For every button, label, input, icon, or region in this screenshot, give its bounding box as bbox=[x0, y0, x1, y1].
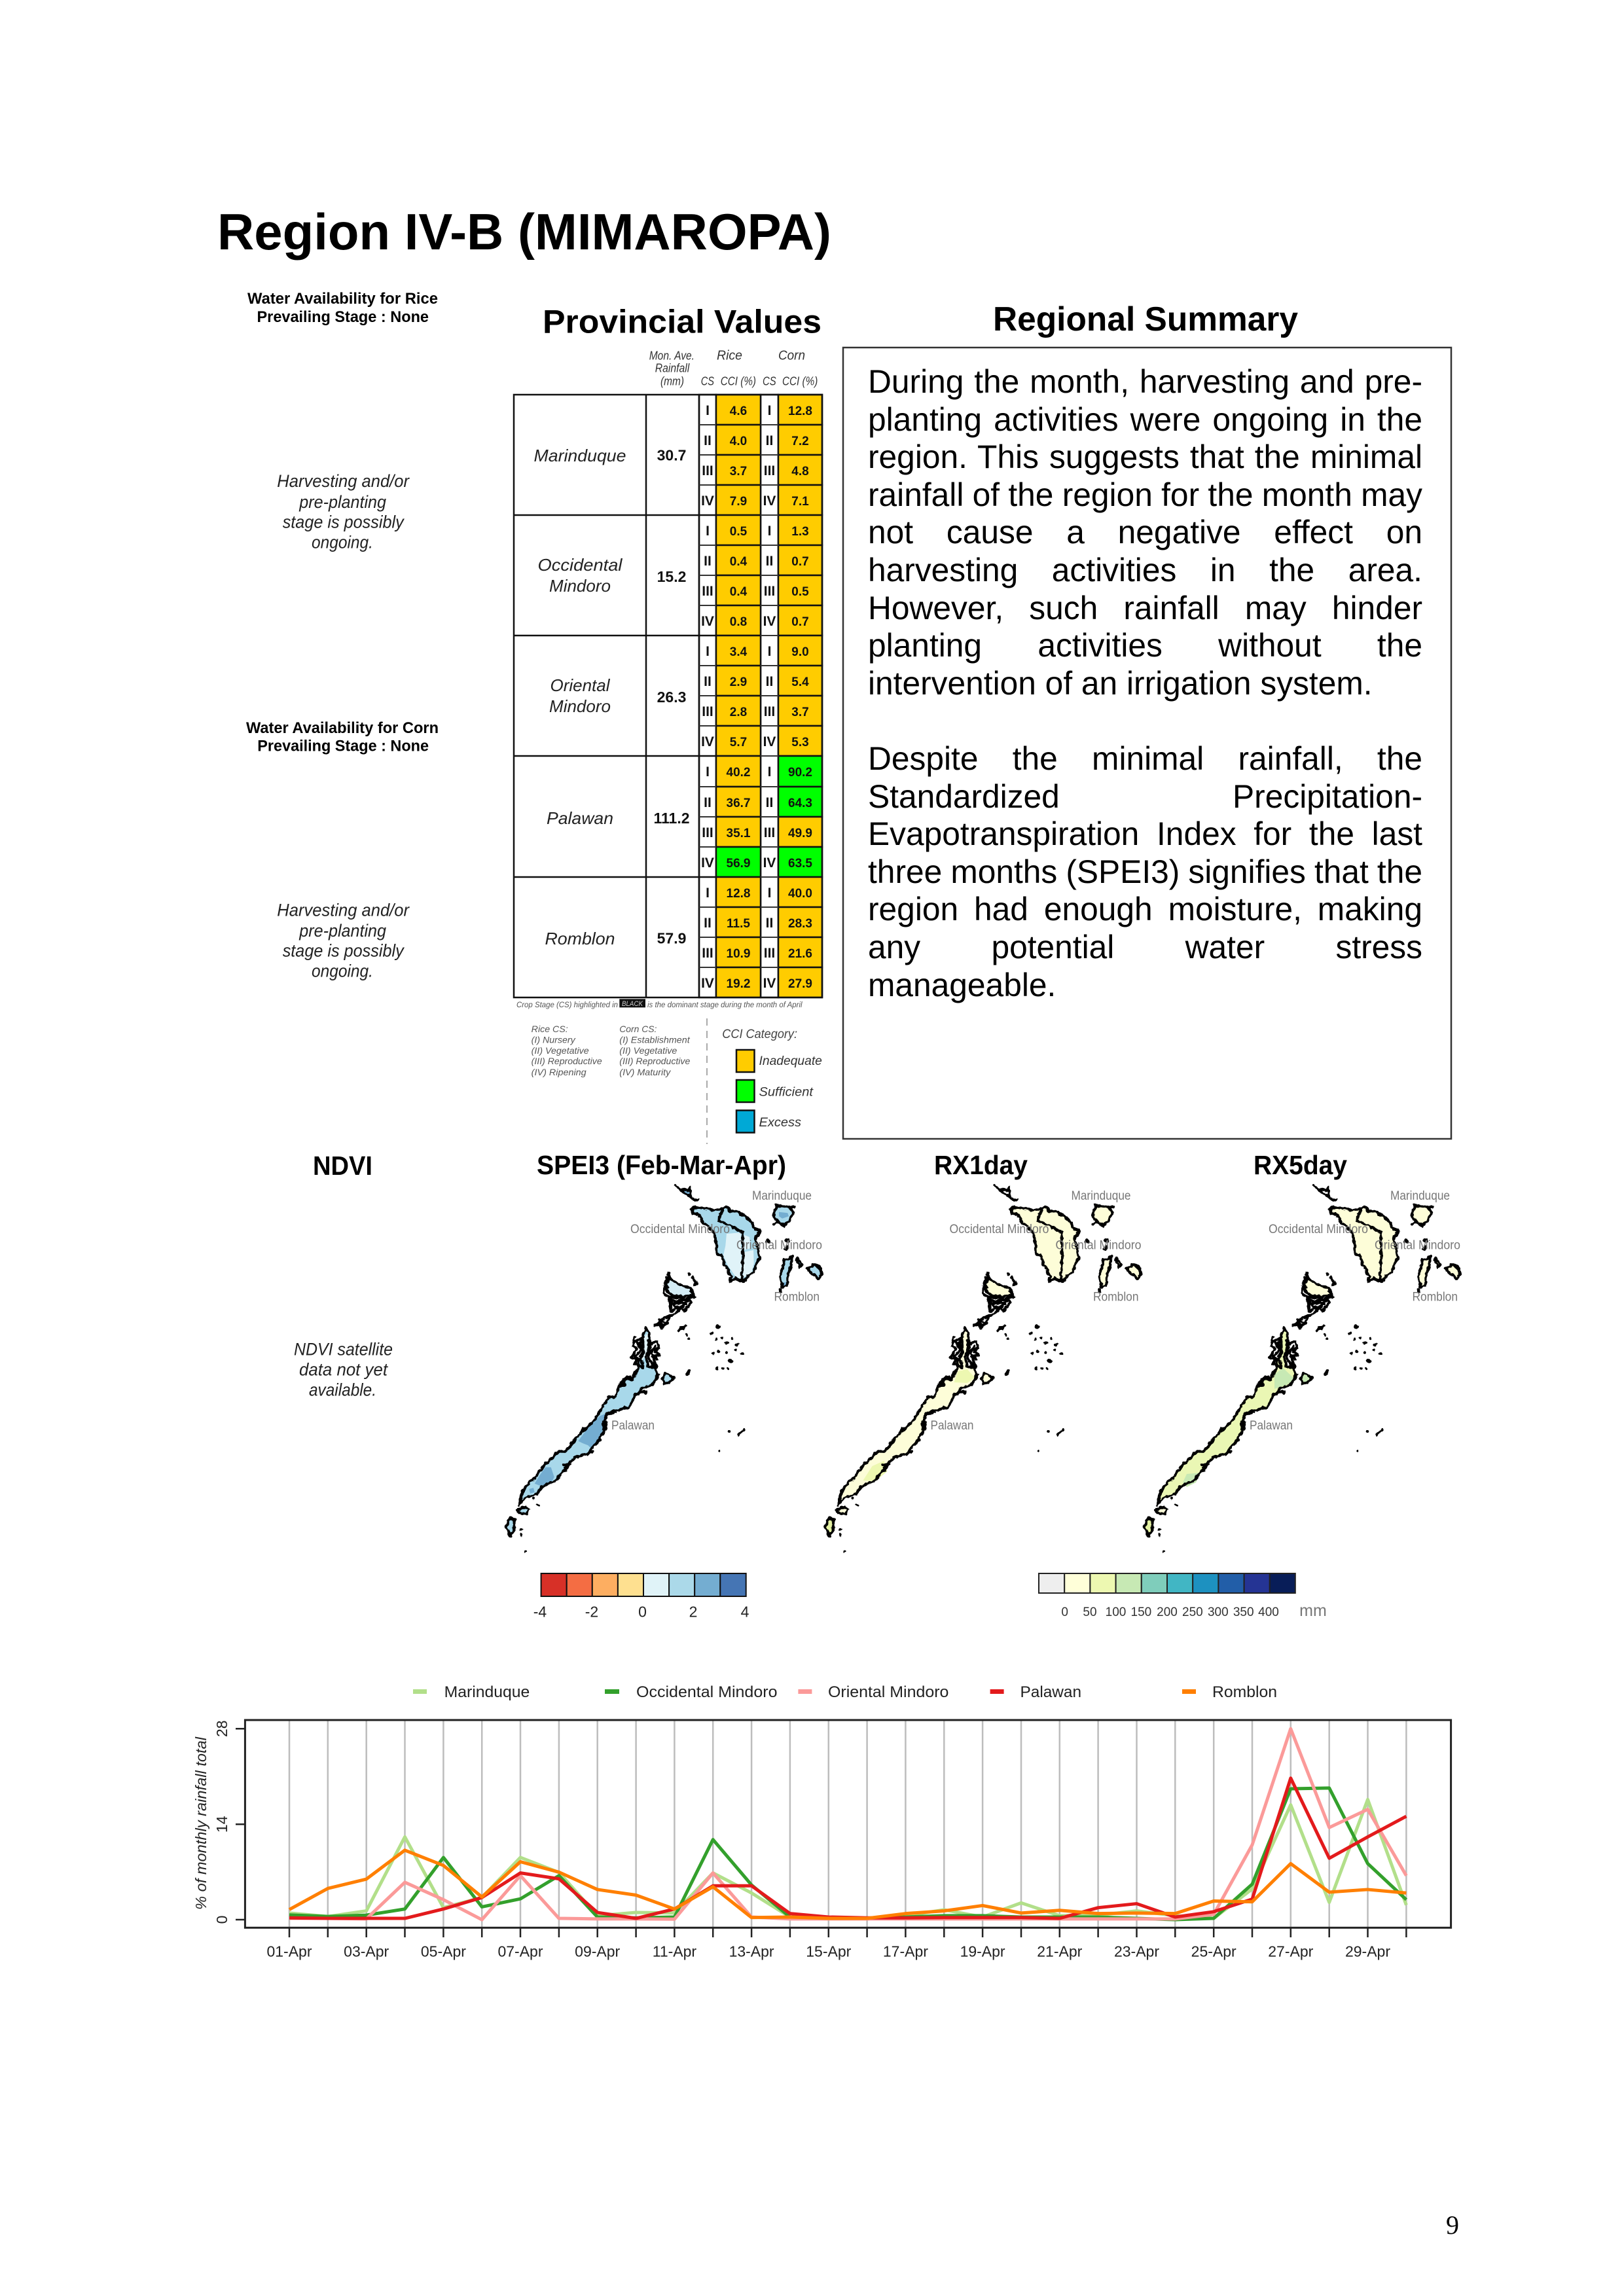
legend: rice crop stages: (I) Nursery bbox=[532, 1034, 576, 1045]
row group: Palawan: IV bbox=[701, 855, 714, 870]
row group: Oriental Mindoro: II bbox=[704, 674, 712, 689]
colour bar: SPEI3: 4 bbox=[741, 1604, 749, 1621]
row group: Oriental Mindoro: IV bbox=[701, 734, 714, 749]
y axis labels: % of monthly rainfall total bbox=[192, 1736, 209, 1910]
text block: corn stage note: stage is possibly bbox=[283, 941, 405, 961]
y axis labels: 28 bbox=[213, 1720, 230, 1737]
row group: Palawan: 90.2 bbox=[788, 766, 812, 780]
row group: Occidental Mindoro: Mindoro bbox=[549, 576, 611, 596]
series: Marinduque bbox=[289, 1799, 1406, 1918]
text block: regional summary: Standardized Precipitation- bbox=[868, 778, 1422, 815]
row group: Occidental Mindoro: II bbox=[766, 554, 773, 569]
row group: Palawan bbox=[547, 764, 812, 870]
heading: RX5day: RX5day bbox=[1254, 1150, 1347, 1180]
legend: corn crop stages: (I) Establishment bbox=[619, 1034, 691, 1045]
colour bar: SPEI3 bbox=[533, 1573, 749, 1621]
row group: Oriental Mindoro: 2.8 bbox=[730, 706, 747, 719]
series: Romblon bbox=[289, 1850, 1406, 1918]
map: SPEI3 bbox=[506, 1185, 822, 1551]
row group: Palawan: 111.2 bbox=[653, 810, 690, 827]
table header bbox=[649, 348, 818, 387]
row group: Marinduque: 30.7 bbox=[657, 446, 686, 463]
row group: Occidental Mindoro: 0.7 bbox=[791, 615, 809, 629]
row group: Marinduque: IV bbox=[763, 493, 776, 509]
legend: corn crop stages: Corn CS: bbox=[619, 1024, 657, 1034]
x axis date labels: 23-Apr bbox=[1114, 1943, 1159, 1960]
text block: regional summary: region had enough moisture, making bbox=[868, 891, 1422, 927]
row group: Occidental Mindoro: 0.4 bbox=[730, 585, 748, 599]
map: RX5day bbox=[1144, 1185, 1460, 1551]
text block: regional summary: Evapotranspiration Index for the last bbox=[868, 816, 1422, 852]
row group: Romblon: IV bbox=[701, 976, 714, 991]
legend: corn crop stages: (II) Vegetative bbox=[619, 1045, 677, 1056]
row group: Oriental Mindoro: 3.7 bbox=[791, 706, 809, 719]
text block: rice stage note: Harvesting and/or bbox=[277, 471, 410, 491]
row group: Romblon: 40.0 bbox=[788, 887, 812, 901]
heading: provincial values: Provincial Values bbox=[543, 304, 821, 340]
text block: regional summary: harvesting activities in the area. bbox=[868, 552, 1422, 588]
x axis date labels: 11-Apr bbox=[653, 1943, 696, 1960]
row group: Occidental Mindoro: IV bbox=[763, 614, 776, 629]
row group: Marinduque: 4.8 bbox=[791, 465, 809, 478]
x axis date labels: 13-Apr bbox=[729, 1943, 774, 1960]
legend: rice crop stages: (II) Vegetative bbox=[532, 1045, 589, 1056]
chart legend bbox=[413, 1683, 1277, 1701]
legend: CCI category: Excess bbox=[759, 1116, 802, 1130]
y axis labels: 14 bbox=[213, 1816, 230, 1833]
text block: regional summary: intervention of an irrigation system. bbox=[868, 665, 1373, 702]
x axis date labels: 01-Apr bbox=[266, 1943, 312, 1960]
row group: Marinduque: III bbox=[764, 463, 775, 478]
row group: Romblon: 28.3 bbox=[788, 917, 812, 931]
text block: regional summary: any potential water stress bbox=[868, 929, 1422, 965]
row group: Marinduque: IV bbox=[701, 493, 714, 509]
text block: regional summary: planting activities were ongoing in the bbox=[868, 401, 1422, 438]
legend: rice crop stages: (III) Reproductive bbox=[532, 1056, 602, 1066]
text block: NDVI note: NDVI satellite bbox=[294, 1340, 393, 1359]
row group: Palawan: II bbox=[766, 795, 773, 810]
row group: Romblon: III bbox=[702, 946, 713, 961]
row group: Occidental Mindoro: Occidental bbox=[538, 555, 623, 575]
row group: Palawan: I bbox=[706, 764, 710, 780]
row group: Oriental Mindoro: 2.9 bbox=[730, 675, 747, 689]
text block: corn stage note: ongoing. bbox=[312, 961, 373, 981]
row group: Romblon: 11.5 bbox=[727, 917, 750, 931]
colour bar: rainfall mm: 200 bbox=[1157, 1605, 1178, 1619]
footnote: crop stage highlight: BLACK bbox=[622, 1000, 643, 1008]
row group: Occidental Mindoro: III bbox=[764, 584, 775, 599]
colour bar: rainfall mm: 350 bbox=[1233, 1605, 1254, 1619]
footnote: crop stage highlight: is the dominant stage during the month of April bbox=[647, 1001, 803, 1009]
heading: water availability for rice: Prevailing Stage : None bbox=[257, 308, 429, 326]
text block: regional summary: However, such rainfall may hinder bbox=[868, 590, 1422, 626]
row group: Occidental Mindoro: IV bbox=[701, 614, 714, 629]
x axis date labels: 07-Apr bbox=[497, 1943, 543, 1960]
table header: (mm) bbox=[660, 374, 684, 387]
row group: Palawan: 36.7 bbox=[727, 797, 750, 810]
x axis date labels: 27-Apr bbox=[1268, 1943, 1314, 1960]
colour bar: rainfall mm: 250 bbox=[1182, 1605, 1203, 1619]
row group: Oriental Mindoro: III bbox=[702, 704, 713, 719]
row group: Marinduque: 3.7 bbox=[730, 465, 747, 478]
row group: Romblon: 27.9 bbox=[788, 977, 812, 991]
text block: corn stage note: Harvesting and/or bbox=[277, 900, 410, 920]
heading: water availability for corn: Water Availability for Corn bbox=[246, 719, 439, 737]
row group: Oriental Mindoro: Oriental bbox=[550, 675, 611, 695]
text block: regional summary: planting activities without the bbox=[868, 627, 1422, 664]
colour bar: SPEI3: 2 bbox=[689, 1604, 697, 1621]
row group: Oriental Mindoro: 5.7 bbox=[730, 736, 747, 749]
row group: Romblon: IV bbox=[763, 976, 776, 991]
map: RX1day bbox=[825, 1185, 1142, 1551]
text block: regional summary: region. This suggests that the minimal bbox=[868, 439, 1422, 475]
legend: rice crop stages: Rice CS: bbox=[532, 1024, 568, 1034]
line chart: daily rainfall share bbox=[192, 1720, 1451, 1960]
row group: Oriental Mindoro: 5.3 bbox=[791, 736, 809, 749]
text block: corn stage note: pre-planting bbox=[298, 921, 386, 941]
legend: corn crop stages: (III) Reproductive bbox=[619, 1056, 691, 1066]
colour bar: SPEI3: 0 bbox=[638, 1604, 647, 1621]
row group: Palawan: III bbox=[764, 825, 775, 840]
colour bar: SPEI3: -2 bbox=[585, 1604, 598, 1621]
text block: regional summary: manageable. bbox=[868, 966, 1056, 1003]
heading: RX1day: RX1day bbox=[934, 1150, 1028, 1180]
row group: Romblon: 10.9 bbox=[727, 947, 750, 961]
row group: Palawan: III bbox=[702, 825, 713, 840]
row group: Romblon: 57.9 bbox=[657, 930, 686, 947]
colour bar: rainfall mm: 50 bbox=[1083, 1605, 1097, 1619]
row group: Palawan: 49.9 bbox=[788, 827, 812, 840]
plot frame and axes bbox=[236, 1720, 1451, 1937]
text block: regional summary: During the month, harvesting and pre- bbox=[868, 363, 1422, 400]
row group: Palawan: 35.1 bbox=[727, 827, 751, 840]
row group: Oriental Mindoro: 3.4 bbox=[730, 645, 748, 659]
x axis date labels: 29-Apr bbox=[1345, 1943, 1390, 1960]
x axis date labels: 17-Apr bbox=[883, 1943, 928, 1960]
row group: Occidental Mindoro: 0.7 bbox=[791, 555, 809, 569]
row group: Occidental Mindoro: I bbox=[706, 524, 710, 539]
row group: Romblon: II bbox=[704, 916, 712, 931]
row group: Oriental Mindoro: IV bbox=[763, 734, 776, 749]
text block: NDVI note bbox=[294, 1340, 393, 1400]
row group: Palawan: 56.9 bbox=[727, 857, 750, 870]
table header: CS bbox=[701, 374, 714, 387]
chart legend: Romblon bbox=[1212, 1683, 1277, 1701]
row group: Palawan: 64.3 bbox=[788, 797, 812, 810]
x axis date labels: 09-Apr bbox=[575, 1943, 621, 1960]
page number: 9 bbox=[1446, 2210, 1459, 2240]
table header: CCI (%) bbox=[782, 374, 818, 387]
row group: Occidental Mindoro: 15.2 bbox=[657, 568, 686, 585]
x axis date labels: 03-Apr bbox=[344, 1943, 389, 1960]
row group: Marinduque: 4.0 bbox=[730, 435, 747, 448]
x axis date labels: 05-Apr bbox=[421, 1943, 466, 1960]
colour bar: SPEI3: -4 bbox=[533, 1604, 547, 1621]
heading: NDVI: NDVI bbox=[313, 1151, 372, 1181]
row group: Oriental Mindoro: II bbox=[766, 674, 773, 689]
text block: corn stage note bbox=[277, 900, 410, 981]
text block: regional summary: not cause a negative effect on bbox=[868, 514, 1422, 550]
table header: CCI (%) bbox=[721, 374, 756, 387]
legend: rice crop stages: (IV) Ripening bbox=[532, 1067, 586, 1077]
row group: Oriental Mindoro: I bbox=[768, 644, 771, 659]
row group: Marinduque: II bbox=[766, 433, 773, 448]
text block: regional summary bbox=[868, 363, 1422, 1003]
row group: Marinduque: 4.6 bbox=[730, 404, 747, 418]
text block: rice stage note bbox=[277, 471, 410, 552]
colour bar: rainfall mm: 150 bbox=[1131, 1605, 1151, 1619]
heading: regional summary: Regional Summary bbox=[993, 300, 1298, 338]
row group: Palawan: II bbox=[704, 795, 712, 810]
row group: Romblon: 21.6 bbox=[788, 947, 812, 961]
colour bar: rainfall mm: 100 bbox=[1106, 1605, 1126, 1619]
colour bar: rainfall mm: mm bbox=[1299, 1602, 1327, 1620]
row group: Marinduque: I bbox=[768, 403, 771, 418]
x axis date labels: 19-Apr bbox=[960, 1943, 1005, 1960]
row group: Romblon: 12.8 bbox=[727, 887, 750, 901]
x axis date labels: 25-Apr bbox=[1191, 1943, 1236, 1960]
footnote: crop stage highlight bbox=[516, 999, 803, 1009]
y axis labels: 0 bbox=[213, 1916, 230, 1924]
chart legend: Marinduque bbox=[444, 1683, 530, 1701]
legend: rice crop stages bbox=[532, 1024, 602, 1077]
row group: Occidental Mindoro: III bbox=[702, 584, 713, 599]
heading: SPEI3: SPEI3 (Feb-Mar-Apr) bbox=[537, 1150, 786, 1180]
heading: water availability for rice bbox=[247, 290, 438, 326]
row group: Marinduque: I bbox=[706, 403, 710, 418]
row group: Oriental Mindoro: III bbox=[764, 704, 775, 719]
row group: Palawan: Palawan bbox=[547, 808, 613, 828]
row group: Occidental Mindoro: 0.4 bbox=[730, 555, 748, 569]
row group: Marinduque: 7.1 bbox=[791, 495, 809, 509]
row group: Marinduque: 7.9 bbox=[730, 495, 747, 509]
x axis date labels: 15-Apr bbox=[806, 1943, 852, 1960]
row group: Marinduque: 7.2 bbox=[791, 435, 809, 448]
row group: Oriental Mindoro: 5.4 bbox=[791, 675, 809, 689]
row group: Palawan: 40.2 bbox=[727, 766, 750, 780]
row group: Oriental Mindoro bbox=[549, 644, 809, 749]
table header: CS bbox=[763, 374, 776, 387]
table: provincial values bbox=[514, 395, 822, 997]
series: Occidental Mindoro bbox=[289, 1788, 1406, 1920]
row group: Occidental Mindoro: II bbox=[704, 554, 712, 569]
row group: Marinduque: III bbox=[702, 463, 713, 478]
row group: Oriental Mindoro: I bbox=[706, 644, 710, 659]
x axis date labels bbox=[266, 1943, 1390, 1960]
y axis labels bbox=[192, 1720, 230, 1924]
row group: Palawan: I bbox=[768, 764, 771, 780]
heading: water availability for corn: Prevailing Stage : None bbox=[257, 738, 429, 755]
chart legend: Occidental Mindoro bbox=[636, 1683, 778, 1701]
legend: CCI category: Inadequate bbox=[759, 1054, 822, 1068]
row group: Occidental Mindoro: 0.5 bbox=[791, 585, 809, 599]
row group: Oriental Mindoro: 26.3 bbox=[657, 689, 686, 706]
row group: Palawan: 63.5 bbox=[788, 857, 812, 870]
row group: Oriental Mindoro: Mindoro bbox=[549, 696, 611, 716]
row group: Romblon bbox=[545, 886, 812, 991]
row group: Oriental Mindoro: 9.0 bbox=[791, 645, 809, 659]
legend: corn crop stages: (IV) Maturity bbox=[619, 1067, 671, 1077]
chart legend: Oriental Mindoro bbox=[828, 1683, 948, 1701]
row group: Marinduque: 12.8 bbox=[788, 404, 812, 418]
row group: Marinduque: Marinduque bbox=[534, 446, 626, 465]
row group: Romblon: Romblon bbox=[545, 929, 615, 948]
table header: Corn bbox=[778, 348, 805, 363]
table header: Mon. Ave. bbox=[649, 349, 695, 362]
heading: water availability for rice: Water Availability for Rice bbox=[247, 290, 438, 308]
row group: Marinduque: II bbox=[704, 433, 712, 448]
chart legend: Palawan bbox=[1020, 1683, 1081, 1701]
table header: Rice bbox=[717, 348, 742, 363]
text block: rice stage note: pre-planting bbox=[298, 492, 386, 512]
text block: regional summary: Despite the minimal rainfall, the bbox=[868, 740, 1422, 777]
row group: Occidental Mindoro: I bbox=[768, 524, 771, 539]
row group: Marinduque bbox=[534, 403, 812, 509]
legend: CCI category: CCI Category: bbox=[722, 1028, 797, 1041]
row group: Romblon: III bbox=[764, 946, 775, 961]
cell fills: crop stage and CCI colours bbox=[699, 395, 822, 997]
x axis date labels: 21-Apr bbox=[1037, 1943, 1083, 1960]
panel: regional summary box bbox=[843, 348, 1451, 1139]
text block: rice stage note: ongoing. bbox=[312, 533, 373, 552]
series: Oriental Mindoro bbox=[289, 1729, 1406, 1920]
colour bar: rainfall mm: 300 bbox=[1208, 1605, 1229, 1619]
series: Palawan bbox=[289, 1778, 1406, 1918]
footnote: crop stage highlight: Crop Stage (CS) highlighted in bbox=[516, 1001, 618, 1009]
table header: Rainfall bbox=[655, 361, 690, 374]
row group: Romblon: I bbox=[768, 886, 771, 901]
colour bar: rainfall mm: 400 bbox=[1258, 1605, 1279, 1619]
text block: NDVI note: available. bbox=[309, 1380, 376, 1400]
row group: Occidental Mindoro bbox=[538, 524, 809, 629]
legend: CCI category bbox=[722, 1028, 822, 1132]
text block: rice stage note: stage is possibly bbox=[283, 512, 405, 532]
colour bar: rainfall mm: 0 bbox=[1061, 1605, 1068, 1619]
colour bar: rainfall mm bbox=[1039, 1573, 1327, 1620]
text block: NDVI note: data not yet bbox=[299, 1360, 388, 1380]
row group: Romblon: II bbox=[766, 916, 773, 931]
title: Region IV-B (MIMAROPA) bbox=[217, 203, 831, 260]
row group: Occidental Mindoro: 0.5 bbox=[730, 525, 748, 539]
text block: regional summary: rainfall of the region for the month may bbox=[868, 476, 1422, 513]
row group: Occidental Mindoro: 0.8 bbox=[730, 615, 747, 629]
legend: CCI category: Sufficient bbox=[759, 1085, 814, 1100]
row group: Romblon: I bbox=[706, 886, 710, 901]
heading: water availability for corn bbox=[246, 719, 439, 755]
row group: Romblon: 19.2 bbox=[727, 977, 750, 991]
text block: regional summary: three months (SPEI3) signifies that the bbox=[868, 853, 1422, 890]
row group: Occidental Mindoro: 1.3 bbox=[791, 525, 809, 539]
row group: Palawan: IV bbox=[763, 855, 776, 870]
legend: corn crop stages bbox=[619, 1024, 691, 1077]
